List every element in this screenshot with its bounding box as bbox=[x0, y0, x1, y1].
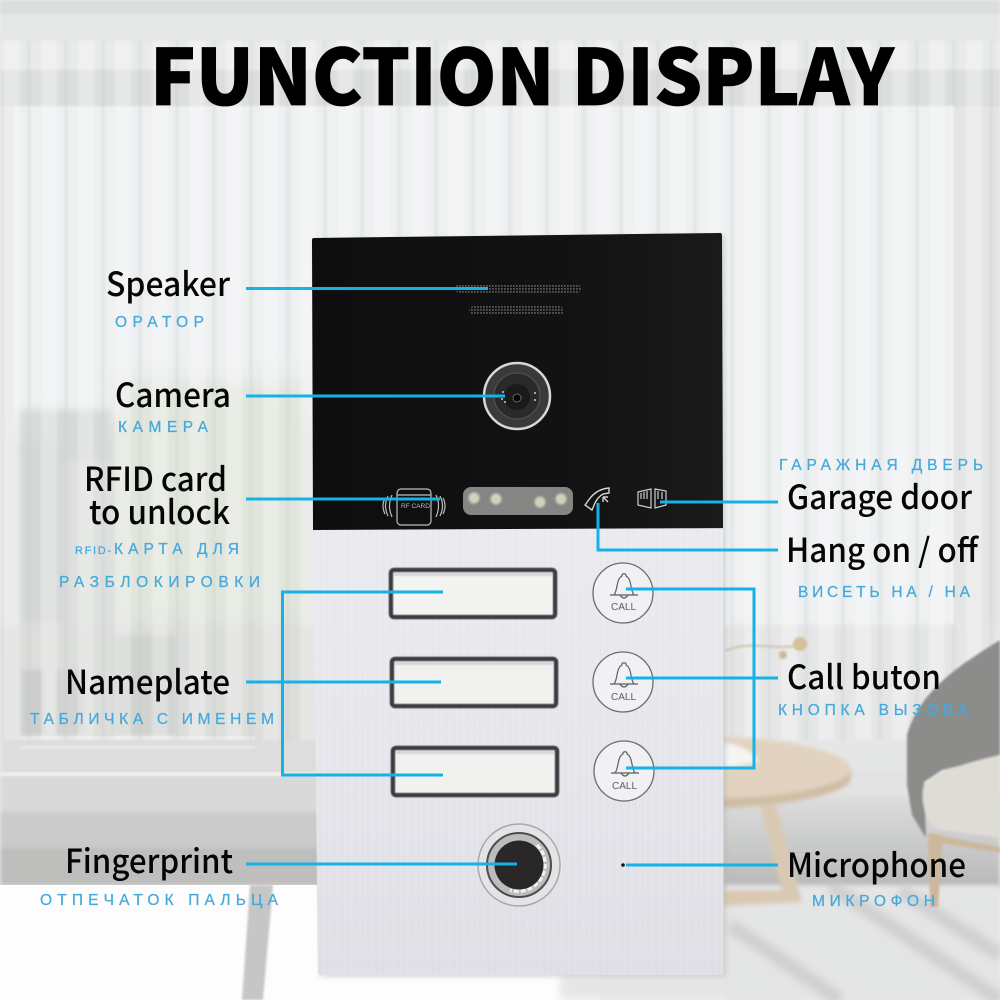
label: RFID card: РАЗБЛОКИРОВКИ bbox=[59, 574, 260, 591]
line: camera bbox=[246, 394, 505, 398]
callout lines bbox=[246, 288, 778, 865]
background: dried branch bbox=[725, 637, 807, 659]
background: armchair bbox=[907, 640, 1000, 907]
call button 1: CALL bbox=[611, 602, 636, 613]
fingerprint sensor bbox=[478, 824, 560, 906]
LED strip bbox=[463, 487, 573, 515]
label: garage door: Garage door bbox=[787, 471, 972, 519]
label: RFID card: RFID card bbox=[84, 453, 227, 501]
label: microphone: Microphone bbox=[787, 839, 966, 887]
microphone hole bbox=[621, 863, 625, 867]
panel: black glass upper body bbox=[312, 233, 723, 530]
nameplate 3 bbox=[393, 748, 557, 795]
label: RFID card: RFID- bbox=[75, 545, 111, 557]
background: coffee table bbox=[723, 737, 852, 906]
title: FUNCTION DISPLAY bbox=[150, 17, 895, 128]
line: fingerprint bbox=[246, 862, 517, 866]
label: nameplate: ТАБЛИЧКА С ИМЕНЕМ bbox=[30, 711, 274, 728]
icon: handset bbox=[585, 488, 609, 510]
label: call button: Call buton bbox=[787, 651, 941, 699]
label: nameplate: Nameplate bbox=[65, 656, 230, 704]
panel: brushed metal lower body bbox=[313, 529, 724, 975]
label: call button bbox=[778, 651, 969, 719]
call button 2: CALL bbox=[611, 692, 636, 703]
label: hang on / off: ВИСЕТЬ НА / НА bbox=[798, 584, 971, 601]
line: nameplate bracket bbox=[246, 592, 443, 775]
label: hang on / off: Hang on / off bbox=[786, 524, 980, 572]
speaker grille bbox=[455, 284, 581, 315]
label: RFID card: to unlock bbox=[89, 486, 230, 534]
label: fingerprint: Fingerprint bbox=[65, 835, 233, 883]
label: fingerprint bbox=[40, 835, 279, 909]
label: hang on / off bbox=[786, 524, 980, 601]
line: garage door bbox=[660, 500, 778, 504]
icon: RF card bbox=[383, 489, 445, 525]
nameplate 1 bbox=[391, 570, 555, 617]
label: RFID card: КАРТА ДЛЯ bbox=[114, 541, 239, 558]
icon: garage door bbox=[638, 489, 666, 508]
call button 1 bbox=[593, 563, 653, 623]
line: hang on/off bbox=[598, 503, 778, 550]
line: microphone bbox=[626, 864, 778, 866]
label: camera: Camera bbox=[115, 369, 231, 417]
label: fingerprint: ОТПЕЧАТОК ПАЛЬЦА bbox=[40, 892, 279, 909]
label: microphone: МИКРОФОН bbox=[812, 893, 935, 910]
label: speaker: Speaker bbox=[106, 258, 230, 306]
call button 2 bbox=[593, 652, 653, 712]
call button 3: CALL bbox=[612, 781, 637, 792]
intercom panel bbox=[312, 233, 726, 977]
label: speaker bbox=[106, 258, 230, 331]
line: call button bracket bbox=[626, 589, 778, 768]
label: call button: КНОПКА ВЫЗОВА bbox=[778, 702, 969, 719]
line: speaker bbox=[246, 287, 488, 290]
label: camera: КАМЕРА bbox=[118, 419, 209, 436]
label: camera bbox=[115, 369, 231, 436]
icon: RF card: RF CARD bbox=[401, 503, 430, 510]
camera lens bbox=[484, 363, 550, 429]
label: microphone bbox=[787, 839, 966, 910]
label: nameplate bbox=[30, 656, 274, 728]
label: RFID card bbox=[59, 453, 260, 591]
line: RFID bbox=[246, 498, 440, 500]
call button 3 bbox=[594, 741, 654, 801]
nameplate 2 bbox=[392, 659, 556, 706]
label: speaker: ОРАТОР bbox=[115, 314, 204, 331]
nameplates bbox=[391, 570, 557, 795]
label: garage door: ГАРАЖНАЯ ДВЕРЬ bbox=[779, 457, 983, 474]
